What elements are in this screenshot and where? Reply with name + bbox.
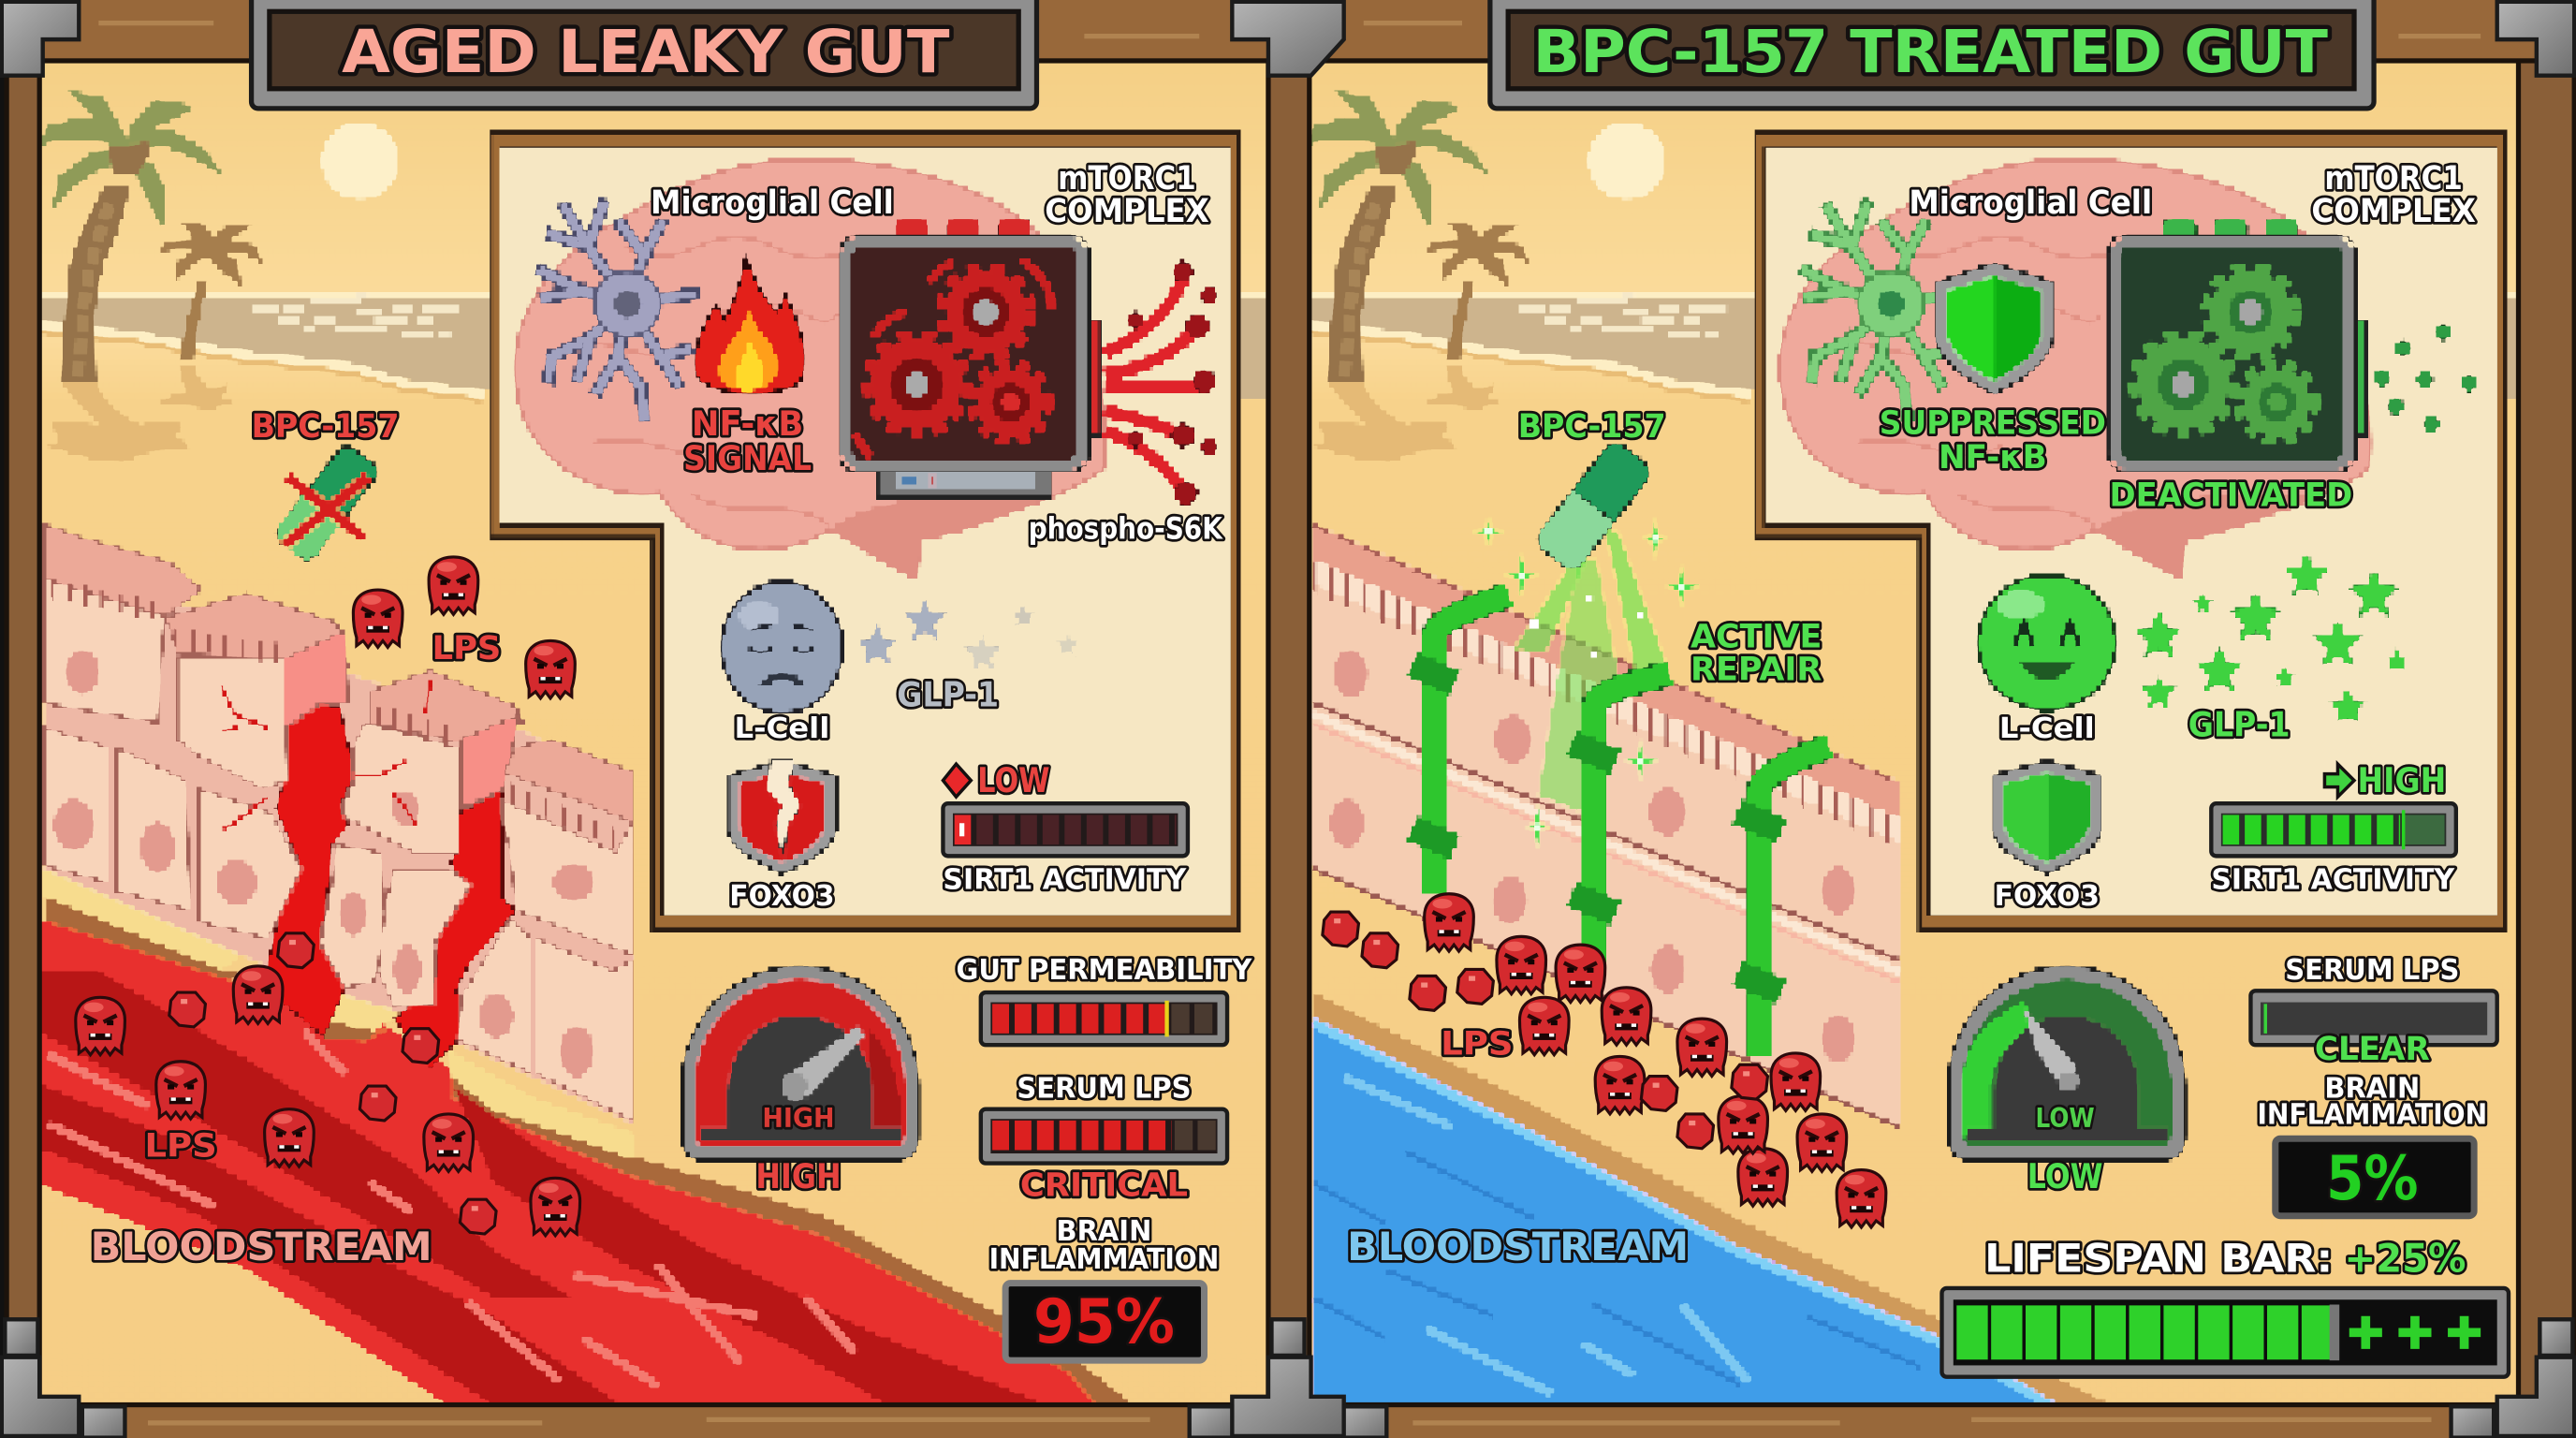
label: LPS: LPS <box>1441 1025 1513 1064</box>
label: microglial cell: Microglial Cell <box>651 183 894 222</box>
bar: serum LPS <box>2250 990 2497 1045</box>
bar: serum LPS <box>981 1109 1227 1164</box>
readout: 5%: 5% <box>2326 1144 2418 1214</box>
label: SIRT1 activity: SIRT1 ACTIVITY <box>2211 863 2454 896</box>
label: NF-kB signal <box>683 404 812 478</box>
bar: gut permeability <box>981 992 1227 1045</box>
label: serum LPS: SERUM LPS <box>1017 1072 1191 1105</box>
inset panel: brain and signalling <box>1753 130 2509 933</box>
icon: microglial cell <box>542 205 694 416</box>
label: deactivated: DEACTIVATED <box>2110 477 2352 515</box>
gauge: high <box>681 966 918 1160</box>
inset panel: brain and signalling <box>488 130 1242 933</box>
label: gauge low: LOW <box>2027 1156 2102 1196</box>
label: brain inflammation <box>2257 1072 2487 1131</box>
label: suppressed NF-kB <box>1880 404 2106 477</box>
inactive green particles <box>2374 324 2478 433</box>
phospho-S6K spray <box>1104 261 1218 505</box>
label: brain inflammation: BRAIN <box>1057 1215 1151 1248</box>
icon: happy L-cell <box>1978 575 2116 710</box>
label: mTORC1 complex: COMPLEX <box>1045 192 1209 230</box>
label: FOXO3: FOXO3 <box>1995 880 2100 913</box>
label: mTORC1 complex: COMPLEX <box>2311 192 2476 230</box>
brain <box>515 159 1105 579</box>
brain <box>1779 159 2370 579</box>
label: gauge high: HIGH <box>755 1156 842 1196</box>
label: GLP-1: GLP-1 <box>2188 704 2291 744</box>
gauge: low <box>1949 966 2185 1160</box>
readout: 95%: 95% <box>1033 1287 1175 1357</box>
label: GLP-1: GLP-1 <box>897 675 999 715</box>
label: active repair: REPAIR <box>1690 651 1822 689</box>
label: L-cell: L-Cell <box>1999 712 2095 745</box>
green repair staples on the wall <box>1412 594 1830 1056</box>
GLP-1 stars <box>2135 552 2408 724</box>
label: phospho-S6K: phospho-S6K <box>1029 513 1223 547</box>
label: L-cell: L-Cell <box>735 712 829 745</box>
SIRT1 low indicator: LOW <box>977 760 1050 800</box>
panel: aged leaky gut <box>43 63 1268 1406</box>
label: LPS lower: LPS <box>145 1127 217 1166</box>
bloodstream: clear blue water <box>1312 990 2116 1406</box>
label: mTORC1 complex: mTORC1 <box>2324 159 2463 198</box>
artwork: right panel pixel scene <box>1310 63 2535 1406</box>
label: NF-kB signal: NF-κB <box>692 404 803 444</box>
label: suppressed NF-kB: SUPPRESSED <box>1880 404 2106 442</box>
bar: SIRT1 activity <box>2211 803 2456 856</box>
icon: BPC-157 pill <box>1532 438 1655 574</box>
label: brain inflammation: INFLAMMATION <box>989 1243 1219 1276</box>
label: mTORC1 complex: mTORC1 <box>1058 159 1196 198</box>
title: aged leaky gut <box>252 0 1036 109</box>
label: lifespan bar: LIFESPAN BAR: <box>1984 1235 2333 1281</box>
label: clear: CLEAR <box>2315 1030 2430 1068</box>
panel: BPC-157 treated gut <box>1310 63 2535 1406</box>
label: brain inflammation: INFLAMMATION <box>2257 1098 2487 1131</box>
repair beams and sparkles <box>1472 511 1699 848</box>
label: serum LPS: SERUM LPS <box>2285 954 2459 987</box>
label: brain inflammation <box>989 1215 1219 1276</box>
icon: broken FOXO3 shield <box>728 761 836 874</box>
title: BPC-157 treated gut <box>1490 0 2374 109</box>
bloodstream: red leaking river <box>43 869 1137 1406</box>
label: BPC-157 blocked: BPC-157 <box>252 407 400 446</box>
artwork: left panel pixel scene <box>43 63 1268 1406</box>
SIRT1 low indicator <box>943 760 1050 800</box>
mTORC1 machine: overactive gears <box>840 218 1101 498</box>
icon: shield over NF-kB <box>1935 263 2054 394</box>
label: lifespan bar: +25% <box>2344 1235 2466 1281</box>
icon: FOXO3 shield <box>1993 761 2101 874</box>
icon: sad L-cell <box>722 581 842 713</box>
title: aged leaky gut: AGED LEAKY GUT <box>342 17 949 86</box>
beach scene with palms and sun <box>43 92 1268 463</box>
label: brain inflammation: BRAIN <box>2324 1072 2420 1105</box>
icon: flame <box>695 255 804 393</box>
bar: SIRT1 activity <box>943 803 1188 856</box>
faded GLP-1 stars <box>857 599 1078 669</box>
bar: lifespan +25% <box>1942 1288 2509 1377</box>
label: NF-kB signal: SIGNAL <box>683 438 812 478</box>
label: suppressed NF-kB: NF-κB <box>1939 438 2047 477</box>
icon: healthy microglial cell <box>1806 205 1956 416</box>
label: mTORC1 complex <box>1045 159 1209 230</box>
label: LPS upper: LPS <box>432 629 501 668</box>
SIRT1 high indicator <box>2324 760 2446 800</box>
icon: crossed-out pill <box>272 442 382 564</box>
label: active repair <box>1690 617 1822 689</box>
label: lifespan bar <box>1984 1235 2466 1281</box>
label: active repair: ACTIVE <box>1690 617 1822 655</box>
label: mTORC1 complex <box>2311 159 2476 230</box>
label: critical: CRITICAL <box>1020 1167 1188 1205</box>
label: gauge inner low: LOW <box>2036 1103 2095 1134</box>
title: BPC-157 treated gut: BPC-157 TREATED GUT <box>1532 17 2328 86</box>
readout: 95% <box>1005 1284 1204 1360</box>
label: SIRT1 activity: SIRT1 ACTIVITY <box>943 863 1187 896</box>
label: gut permeability: GUT PERMEABILITY <box>956 954 1252 987</box>
beach scene with palms and sun <box>1310 92 2535 463</box>
label: bloodstream: BLOODSTREAM <box>91 1224 432 1269</box>
readout: 5% <box>2276 1138 2474 1216</box>
label: gauge inner high: HIGH <box>762 1103 835 1134</box>
label: FOXO3: FOXO3 <box>729 880 835 913</box>
cracked intestinal wall cells <box>44 524 633 1158</box>
label: BPC-157: BPC-157 <box>1518 407 1666 446</box>
mTORC1 machine: deactivated gears <box>2108 218 2365 472</box>
label: bloodstream: BLOODSTREAM <box>1347 1224 1689 1269</box>
SIRT1 high indicator: HIGH <box>2358 760 2446 800</box>
label: microglial cell: Microglial Cell <box>1909 183 2152 222</box>
intestinal wall cells <box>1311 522 1899 1127</box>
LPS toxins <box>76 557 580 1236</box>
LPS toxins blocked outside the wall <box>1323 894 1886 1227</box>
